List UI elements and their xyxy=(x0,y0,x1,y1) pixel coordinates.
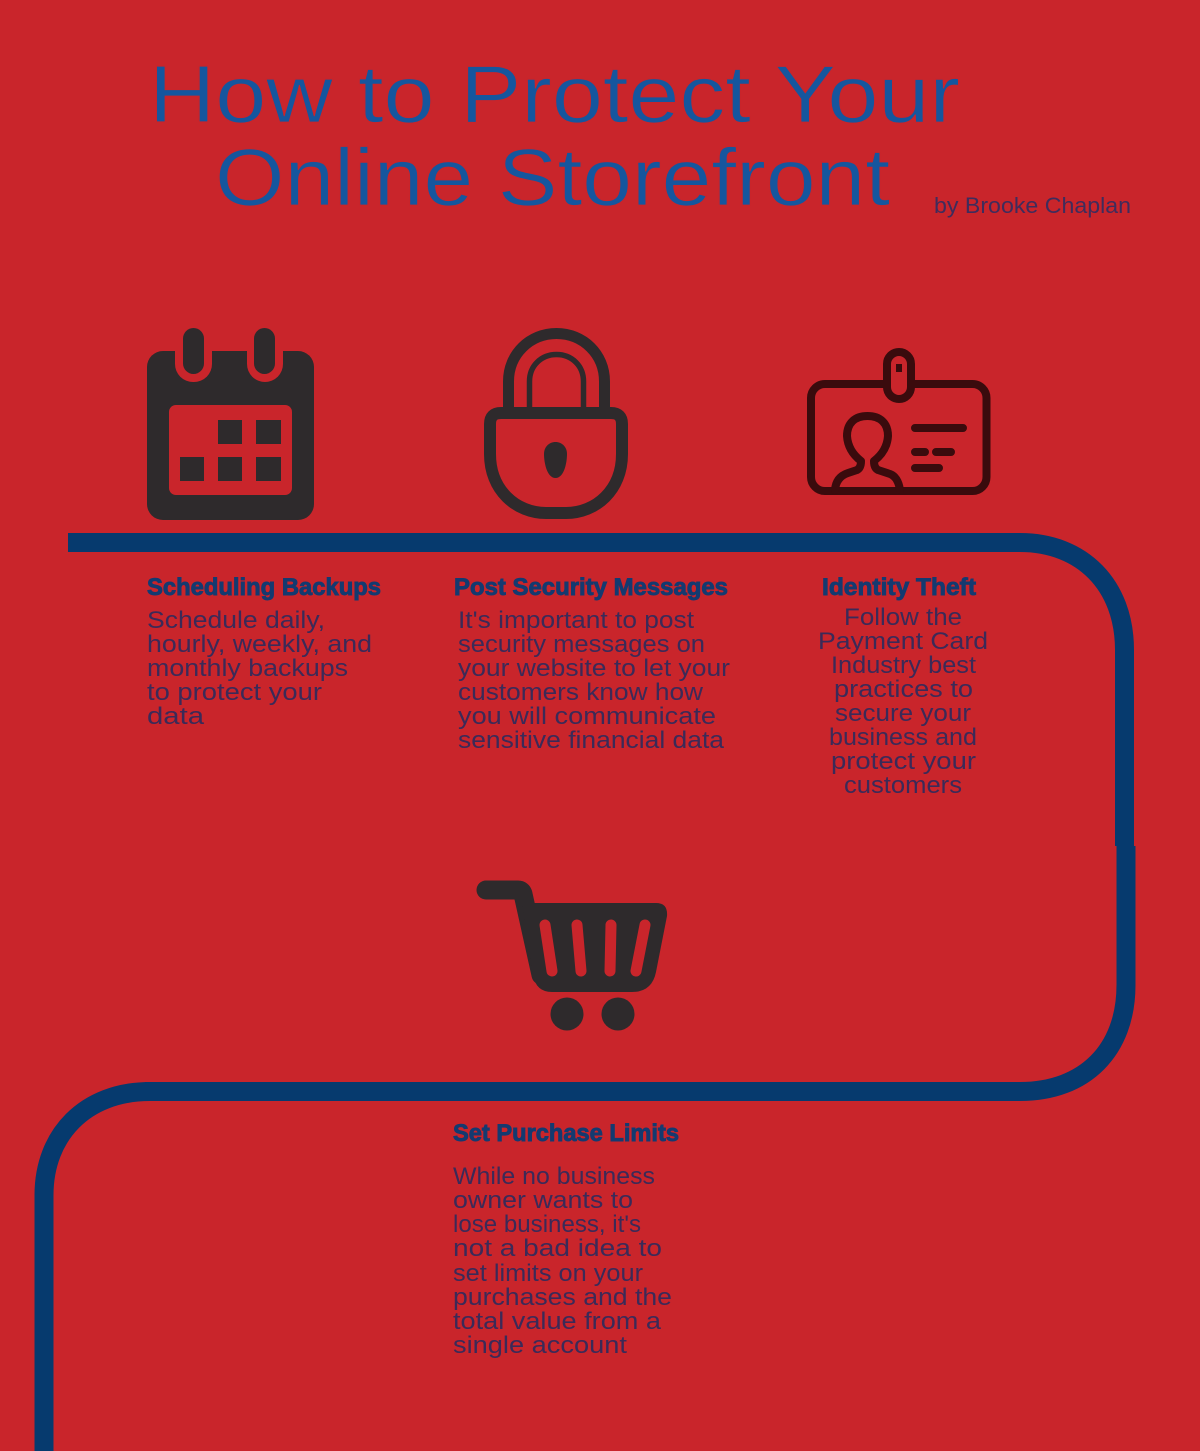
text: post security messages: customers know how xyxy=(458,679,704,706)
icon: shopping cart xyxy=(486,890,667,1030)
text: set purchase limits: set limits on your xyxy=(453,1260,643,1287)
text: identity theft: practices to xyxy=(834,676,973,703)
text: post security messages: It's important to post xyxy=(458,607,694,634)
text: identity theft xyxy=(818,604,988,799)
text: identity theft: business and xyxy=(829,724,977,751)
heading: Scheduling Backups: Scheduling Backups xyxy=(147,574,381,601)
text: set purchase limits: single account xyxy=(453,1332,627,1359)
text: scheduling backups xyxy=(147,607,372,730)
text: post security messages: sensitive financial data xyxy=(458,727,725,754)
text: set purchase limits: While no business xyxy=(453,1163,655,1190)
title: How to Protect Your xyxy=(149,50,960,140)
winding path line xyxy=(44,542,1126,1451)
text: scheduling backups: monthly backups xyxy=(147,655,348,682)
text: scheduling backups: Schedule daily, xyxy=(147,607,325,634)
text: post security messages: security messages on xyxy=(458,631,705,658)
text: set purchase limits: not a bad idea to xyxy=(453,1235,662,1262)
text: identity theft: Industry best xyxy=(831,652,976,679)
heading: Post Security Messages: Post Security Messages xyxy=(454,574,728,601)
heading: Identity Theft: Identity Theft xyxy=(822,574,976,601)
heading: Set Purchase Limits: Set Purchase Limits xyxy=(453,1120,679,1147)
icon: calendar xyxy=(147,328,314,520)
text: set purchase limits: lose business, it's xyxy=(453,1211,641,1238)
text: scheduling backups: to protect your xyxy=(147,679,322,706)
text: set purchase limits: owner wants to xyxy=(453,1187,633,1214)
text: set purchase limits: purchases and the xyxy=(453,1284,672,1311)
text: identity theft: Payment Card xyxy=(818,628,988,655)
text: set purchase limits: total value from a xyxy=(453,1308,662,1335)
title: Online Storefront xyxy=(215,133,890,223)
byline: by Brooke Chaplan xyxy=(934,193,1131,218)
text: identity theft: secure your xyxy=(835,700,971,727)
title xyxy=(149,50,960,223)
text: post security messages: you will communicate xyxy=(458,703,716,730)
text: identity theft: Follow the xyxy=(844,604,962,631)
icon: padlock xyxy=(490,334,622,513)
text: identity theft: customers xyxy=(844,772,962,799)
text: scheduling backups: data xyxy=(147,703,205,730)
text: scheduling backups: hourly, weekly, and xyxy=(147,631,372,658)
icon: ID badge xyxy=(811,352,986,491)
text: set purchase limits xyxy=(453,1163,672,1359)
text: post security messages: your website to let your xyxy=(458,655,730,682)
text: identity theft: protect your xyxy=(831,748,976,775)
text: post security messages xyxy=(458,607,730,754)
